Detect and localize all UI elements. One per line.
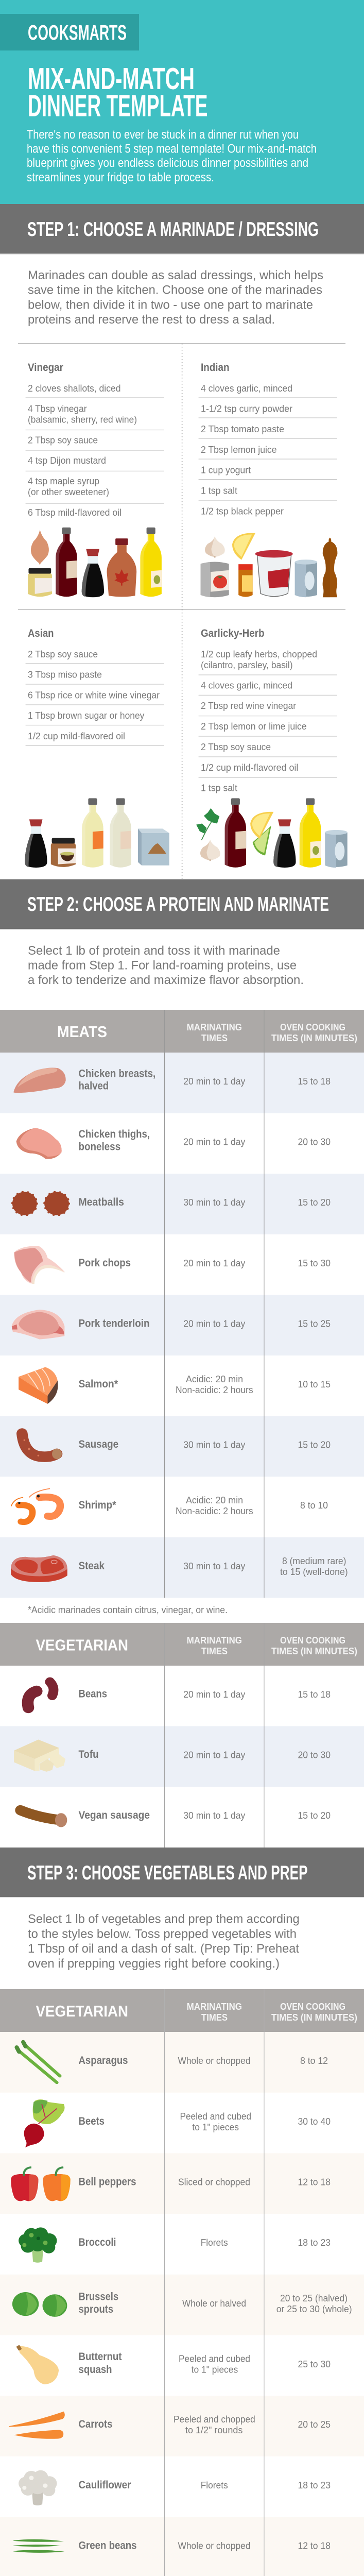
row: carrots: Carrots [78,2418,112,2430]
row: broccoli: Broccoli [78,2236,116,2248]
title [28,62,208,123]
row: beans: Beans [78,1688,107,1700]
icon: beets [24,2099,65,2147]
row: beans: 20 min to 1 day [183,1689,245,1700]
icons: vinegar ingredients [28,528,162,597]
vinegar ingredients: 2 Tbsp soy sauce [28,435,98,446]
row: shrimp: Acidic: 20 min [186,1495,243,1505]
table header: vegetables [0,1989,364,2032]
indian ingredients [199,383,337,517]
row: pork tenderloin: Pork tenderloin [78,1317,149,1329]
icon: pork chop [14,1246,65,1284]
row: bell peppers: Sliced or chopped [178,2177,250,2187]
row: meatballs [0,1174,364,1234]
row: broccoli: Florets [201,2238,228,2248]
row: beans [28,1682,331,1708]
garlicky-herb ingredients: 2 Tbsp soy sauce [201,742,271,752]
vinegar ingredients: 4 tsp Dijon mustard [28,455,106,466]
row: vegan sausage [21,1809,331,1827]
icon: pork tenderloin [12,1310,64,1340]
row: butternut squash: Peeled and cubed [179,2353,250,2364]
icon: beans [28,1682,54,1708]
asian ingredients: 6 Tbsp rice or white wine vinegar [28,690,160,700]
intro text: There's no reason to ever be stuck in a dinner rut when you [27,128,299,142]
column separators [165,1010,264,1598]
icon: bell peppers [11,2167,71,2201]
intro text: blueprint gives you endless delicious dinner possibilities and [27,156,308,170]
icon: shrimp [11,1488,60,1522]
table header: meats: OVEN COOKING [280,1022,345,1032]
row: steak [0,1537,364,1598]
step 3 text block: oven if prepping veggies right before cooking.) [28,1957,280,1971]
step 2 text block: Select 1 lb of protein and toss it with marinade [28,944,280,958]
step 3 heading bar [0,1848,364,1897]
row: tofu: 20 min to 1 day [183,1750,245,1760]
row: vegan sausage: Vegan sausage [78,1809,150,1821]
row: sausage: 15 to 20 [298,1440,331,1450]
row: green beans: Whole or chopped [178,2541,250,2551]
row: shrimp: 8 to 10 [300,1500,328,1511]
row: salmon: Salmon* [78,1378,118,1390]
icon: green beans [13,2539,64,2553]
row: brussels sprouts: Brussels [78,2291,118,2302]
panel: header [0,0,364,204]
row: chicken breasts: halved [78,1080,109,1092]
intro text: have this convenient 5 step meal template! Our mix-and-match [27,142,317,156]
icon: salmon [19,1367,58,1404]
row: shrimp: Non-acidic: 2 hours [176,1506,253,1516]
step 2 text block [28,944,304,987]
row: shrimp: Shrimp* [78,1499,116,1511]
row: chicken thighs: Chicken thighs, [78,1128,150,1140]
row: beets: 30 to 40 [298,2116,331,2127]
indian ingredients: 1-1/2 tsp curry powder [201,404,292,414]
row: carrots: Peeled and chopped [174,2414,255,2425]
row: pork chops: Pork chops [78,1257,131,1269]
logo band [0,14,139,50]
marinade: vinegar: Vinegar [28,362,63,374]
step 2 text block: a fork to tenderize and maximize flavor absorption. [28,973,304,987]
garlicky-herb ingredients: 4 cloves garlic, minced [201,680,292,690]
row: sausage: Sausage [78,1438,118,1450]
table header: vegetables: VEGETARIAN [36,2002,128,2020]
row: steak: Steak [78,1560,105,1572]
row: meatballs: 30 min to 1 day [183,1197,245,1208]
icon: chicken thigh [16,1128,62,1159]
row: broccoli: 18 to 23 [298,2238,331,2248]
row: meatballs: Meatballs [78,1196,124,1208]
row: brussels sprouts [0,2275,364,2335]
indian ingredients: 1/2 tsp black pepper [201,506,284,517]
table header: vegetarian: VEGETARIAN [36,1636,128,1654]
icons: asian ingredients [25,798,169,868]
row: beans: 15 to 18 [298,1689,331,1700]
garlicky-herb ingredients [199,649,337,793]
panel: marinades grid [18,344,348,879]
row: sausage [0,1416,364,1477]
row: carrots [0,2396,364,2456]
table header: meats: TIMES [201,1033,228,1043]
table header: vegetables: TIMES [201,2012,228,2023]
row: asparagus: Whole or chopped [178,2056,250,2066]
row: butternut squash [16,2345,331,2384]
footnote: *Acidic marinades contain citrus, vinegar, or wine. [28,1605,228,1615]
row: brussels sprouts: or 25 to 30 (whole) [276,2304,352,2314]
step 1 text block: save time in the kitchen. Choose one of the marinades [28,283,322,297]
table header: vegetables: MARINATING [187,2002,242,2012]
vinegar ingredients: 4 Tbsp vinegar [28,404,86,414]
row: green beans [0,2517,364,2576]
row: beets: Peeled and cubed [180,2111,251,2122]
vinegar ingredients: (or other sweetener) [28,487,109,497]
icons: indian ingredients [201,533,337,597]
row: chicken breasts: 15 to 18 [298,1076,331,1087]
icon: steak [11,1555,67,1582]
icon: brussels sprouts [12,2292,67,2317]
row: steak: 30 min to 1 day [183,1561,245,1571]
asian ingredients: 1 Tbsp brown sugar or honey [28,710,144,721]
row: chicken thighs: boneless [78,1141,120,1153]
row: cauliflower: Florets [201,2480,228,2490]
marinade: asian: Asian [28,628,54,639]
row: brussels sprouts: Whole or halved [182,2298,246,2309]
icon: broccoli [19,2227,57,2263]
icon: chicken breast [13,1068,66,1093]
row: carrots: 20 to 25 [298,2419,331,2430]
vinegar ingredients: 2 cloves shallots, diced [28,383,120,394]
step 1 text block: Marinades can double as salad dressings, which helps [28,268,323,282]
row: butternut squash: Butternut [78,2351,122,2363]
icon: meatballs [12,1192,69,1215]
row: pork tenderloin: 15 to 25 [298,1318,331,1329]
row: butternut squash: 25 to 30 [298,2359,331,2369]
row: green beans: Green beans [78,2540,137,2551]
table header: meats [0,1010,364,1053]
marinade: vinegar [26,362,164,597]
indian ingredients: 1 tsp salt [201,485,237,496]
row: chicken breasts: Chicken breasts, [78,1067,155,1079]
row: cauliflower: Cauliflower [78,2479,131,2491]
step 2 text block: made from Step 1. For land-roaming proteins, use [28,958,297,972]
column separators [165,1989,264,2576]
row: tofu [0,1726,364,1787]
garlicky-herb ingredients: 2 Tbsp red wine vinegar [201,701,296,711]
table: vegetables [0,1989,364,2576]
table header: vegetables: OVEN COOKING [280,2002,345,2012]
marinade: indian: Indian [201,362,230,374]
row: steak: 8 (medium rare) [282,1556,346,1566]
garlicky-herb ingredients: 1 tsp salt [201,783,237,793]
asian ingredients: 1/2 cup mild-flavored oil [28,731,125,741]
table header: vegetarian [0,1623,364,1666]
icon: butternut squash [16,2345,59,2384]
table header: vegetarian: OVEN COOKING [280,1635,345,1646]
row: green beans: 12 to 18 [298,2541,331,2551]
row: cauliflower [19,2470,331,2505]
row: bell peppers: 12 to 18 [298,2177,331,2187]
row: bell peppers [0,2153,364,2214]
step 3 text block: Select 1 lb of vegetables and prep them according [28,1912,300,1926]
marinade: garlicky-herb [196,628,348,868]
row: beets: Beets [78,2115,105,2127]
table header: meats: TIMES (IN MINUTES) [271,1033,357,1043]
row: salmon: 10 to 15 [298,1379,331,1389]
row: vegan sausage: 30 min to 1 day [183,1810,245,1821]
row: pork chops: 20 min to 1 day [183,1258,245,1268]
vinegar ingredients: 4 tsp maple syrup [28,476,99,486]
indian ingredients: 4 cloves garlic, minced [201,383,292,394]
table header: vegetarian: TIMES [201,1646,228,1656]
row: bell peppers: Bell peppers [78,2176,136,2188]
garlicky-herb ingredients: 1/2 cup leafy herbs, chopped [201,649,317,659]
row: chicken breasts: 20 min to 1 day [183,1076,245,1087]
icon: sausage [22,1434,62,1459]
vinegar ingredients [26,383,164,518]
marinade: indian [199,362,337,597]
indian ingredients: 2 Tbsp lemon juice [201,445,277,455]
row: tofu: 20 to 30 [298,1750,331,1760]
icon: vegan sausage [21,1810,67,1827]
vinegar ingredients: 6 Tbsp mild-flavored oil [28,507,122,518]
garlicky-herb ingredients: 1/2 cup mild-flavored oil [201,762,298,773]
icon: carrots [9,2412,65,2439]
row: salmon: Non-acidic: 2 hours [176,1385,253,1395]
column separators [165,1623,264,1848]
table: vegetarian proteins [0,1623,364,1848]
intro text: streamlines your fridge to table process. [27,171,214,184]
step 3 text block: to the styles below. Toss prepped vegetables with [28,1927,297,1941]
garlicky-herb ingredients: 2 Tbsp lemon or lime juice [201,721,307,732]
row: sausage: 30 min to 1 day [183,1440,245,1450]
asian ingredients: 3 Tbsp miso paste [28,670,102,680]
icon: asparagus [16,2042,60,2082]
row: pork tenderloin [0,1295,364,1355]
icon: cauliflower [19,2470,57,2505]
row: pork tenderloin: 20 min to 1 day [183,1318,245,1329]
asian ingredients [26,649,164,745]
row: asparagus: 8 to 12 [300,2056,328,2066]
table header: vegetarian: MARINATING [187,1635,242,1646]
row: butternut squash: to 1" pieces [192,2365,238,2375]
icon: tofu [14,1739,65,1772]
title: DINNER TEMPLATE [28,89,208,123]
asian ingredients: 2 Tbsp soy sauce [28,649,98,659]
step 1 text block: below, then divide it in two - use one part to marinate [28,298,313,312]
table header: vegetarian: TIMES (IN MINUTES) [271,1646,357,1656]
step 1 text block [28,268,323,327]
step 2 heading bar [0,879,364,929]
table header: meats: MARINATING [187,1022,242,1032]
indian ingredients: 2 Tbsp tomato paste [201,424,284,434]
garlicky-herb ingredients: (cilantro, parsley, basil) [201,660,293,670]
row: salmon: Acidic: 20 min [186,1374,243,1384]
step 3 text block [28,1912,300,1971]
row: tofu: Tofu [78,1749,99,1760]
icons: garlicky-herb ingredients [196,798,348,868]
row: beets: to 1" pieces [192,2122,239,2132]
row: pork chops: 15 to 30 [298,1258,331,1268]
row: salmon [19,1367,331,1404]
row: asparagus: Asparagus [78,2055,128,2066]
indian ingredients: 1 cup yogurt [201,465,251,476]
step 1 heading bar [0,204,364,255]
intro text [27,128,317,184]
row: cauliflower: 18 to 23 [298,2480,331,2490]
row: chicken breasts [0,1053,364,1113]
step 1 text block: proteins and reserve the rest to dress a salad. [28,313,275,327]
row: brussels sprouts: 20 to 25 (halved) [280,2293,348,2303]
row: butternut squash: squash [78,2364,112,2376]
step 3 text block: 1 Tbsp of oil and a dash of salt. (Prep Tip: Preheat [28,1942,299,1956]
row: brussels sprouts: sprouts [78,2303,113,2315]
table header: meats: MEATS [57,1023,107,1041]
logo band: COOKSMARTS [28,21,127,44]
row: shrimp [11,1488,328,1522]
marinade: garlicky-herb: Garlicky-Herb [201,628,265,639]
row: vegan sausage: 15 to 20 [298,1810,331,1821]
row: meatballs: 15 to 20 [298,1197,331,1208]
row: chicken thighs [16,1128,331,1159]
marinade: asian [25,628,169,868]
row: pork chops [14,1246,331,1284]
row: broccoli [19,2227,331,2263]
row: beets [24,2099,331,2147]
vinegar ingredients: (balsamic, sherry, red wine) [28,414,137,425]
row: chicken thighs: 20 to 30 [298,1137,331,1147]
row: chicken thighs: 20 min to 1 day [183,1137,245,1147]
table header: vegetables: TIMES (IN MINUTES) [271,2012,357,2023]
table: meats [0,1010,364,1598]
title: MIX-AND-MATCH [28,62,195,96]
row: steak: to 15 (well-done) [280,1567,348,1577]
row: carrots: to 1/2" rounds [185,2425,242,2435]
row: asparagus [0,2032,364,2093]
